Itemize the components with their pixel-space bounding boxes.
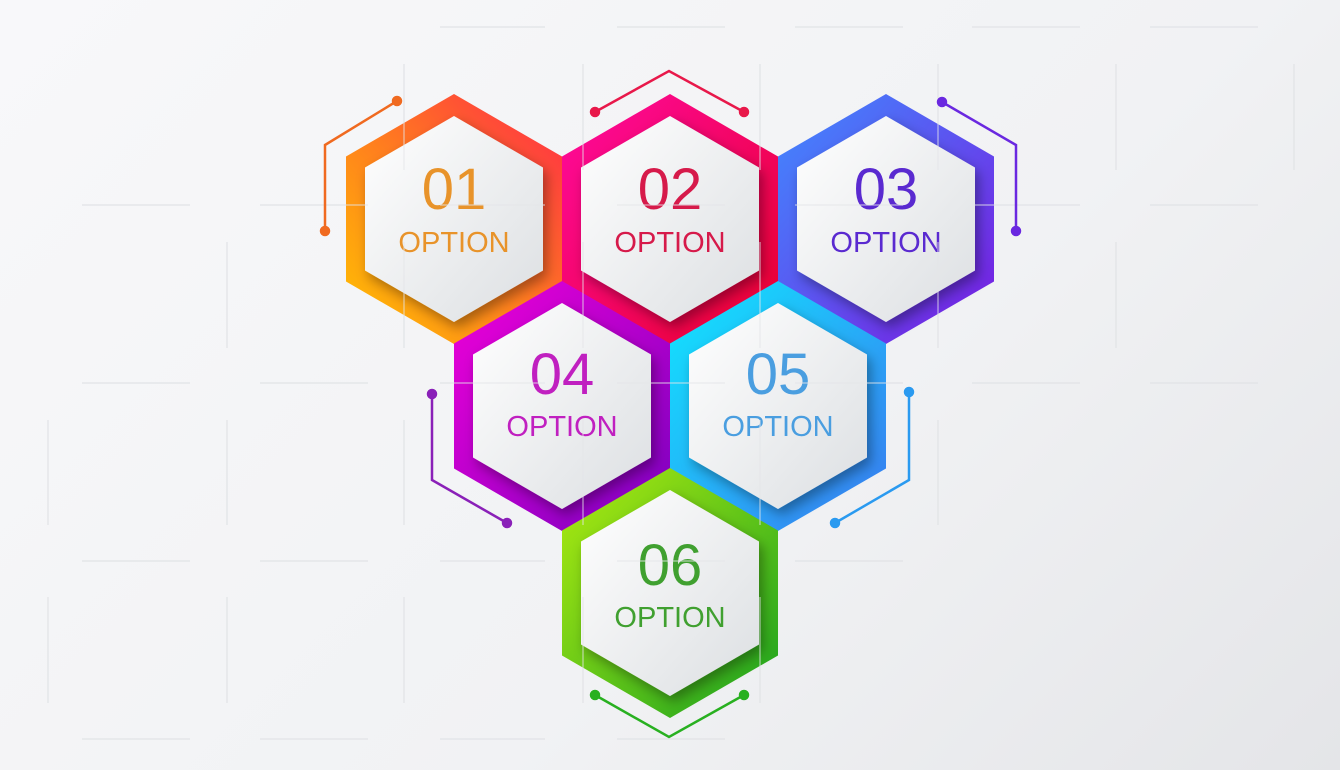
hexagon 03: OPTION: [830, 227, 942, 259]
hexagon 06: 06: [638, 533, 702, 598]
hexagon 03: [778, 94, 994, 344]
connector line 04: [428, 390, 511, 527]
hexagon 05: 05: [746, 342, 810, 407]
hexagon 02: [562, 94, 778, 344]
hexagon 06: OPTION: [614, 602, 726, 634]
hexagon 05: OPTION: [722, 411, 834, 443]
hexagon 01: OPTION: [398, 227, 510, 259]
connector line 03: [938, 98, 1020, 235]
connector line 06: [591, 691, 748, 737]
hexagon 05: [670, 281, 886, 531]
hexagon 02: 02: [638, 157, 702, 222]
hexagon 04: OPTION: [506, 411, 618, 443]
connector line 02: [591, 71, 748, 116]
hexagon 03: 03: [854, 157, 918, 222]
hexagon 02: OPTION: [614, 227, 726, 259]
connector line 05: [831, 388, 913, 527]
hexagon 06: [562, 468, 778, 718]
hexagon 01: 01: [422, 157, 486, 222]
hexagon 04: [454, 281, 670, 531]
connector line 01: [321, 97, 401, 235]
hexagon 04: 04: [530, 342, 594, 407]
hexagon 01: [346, 94, 562, 344]
